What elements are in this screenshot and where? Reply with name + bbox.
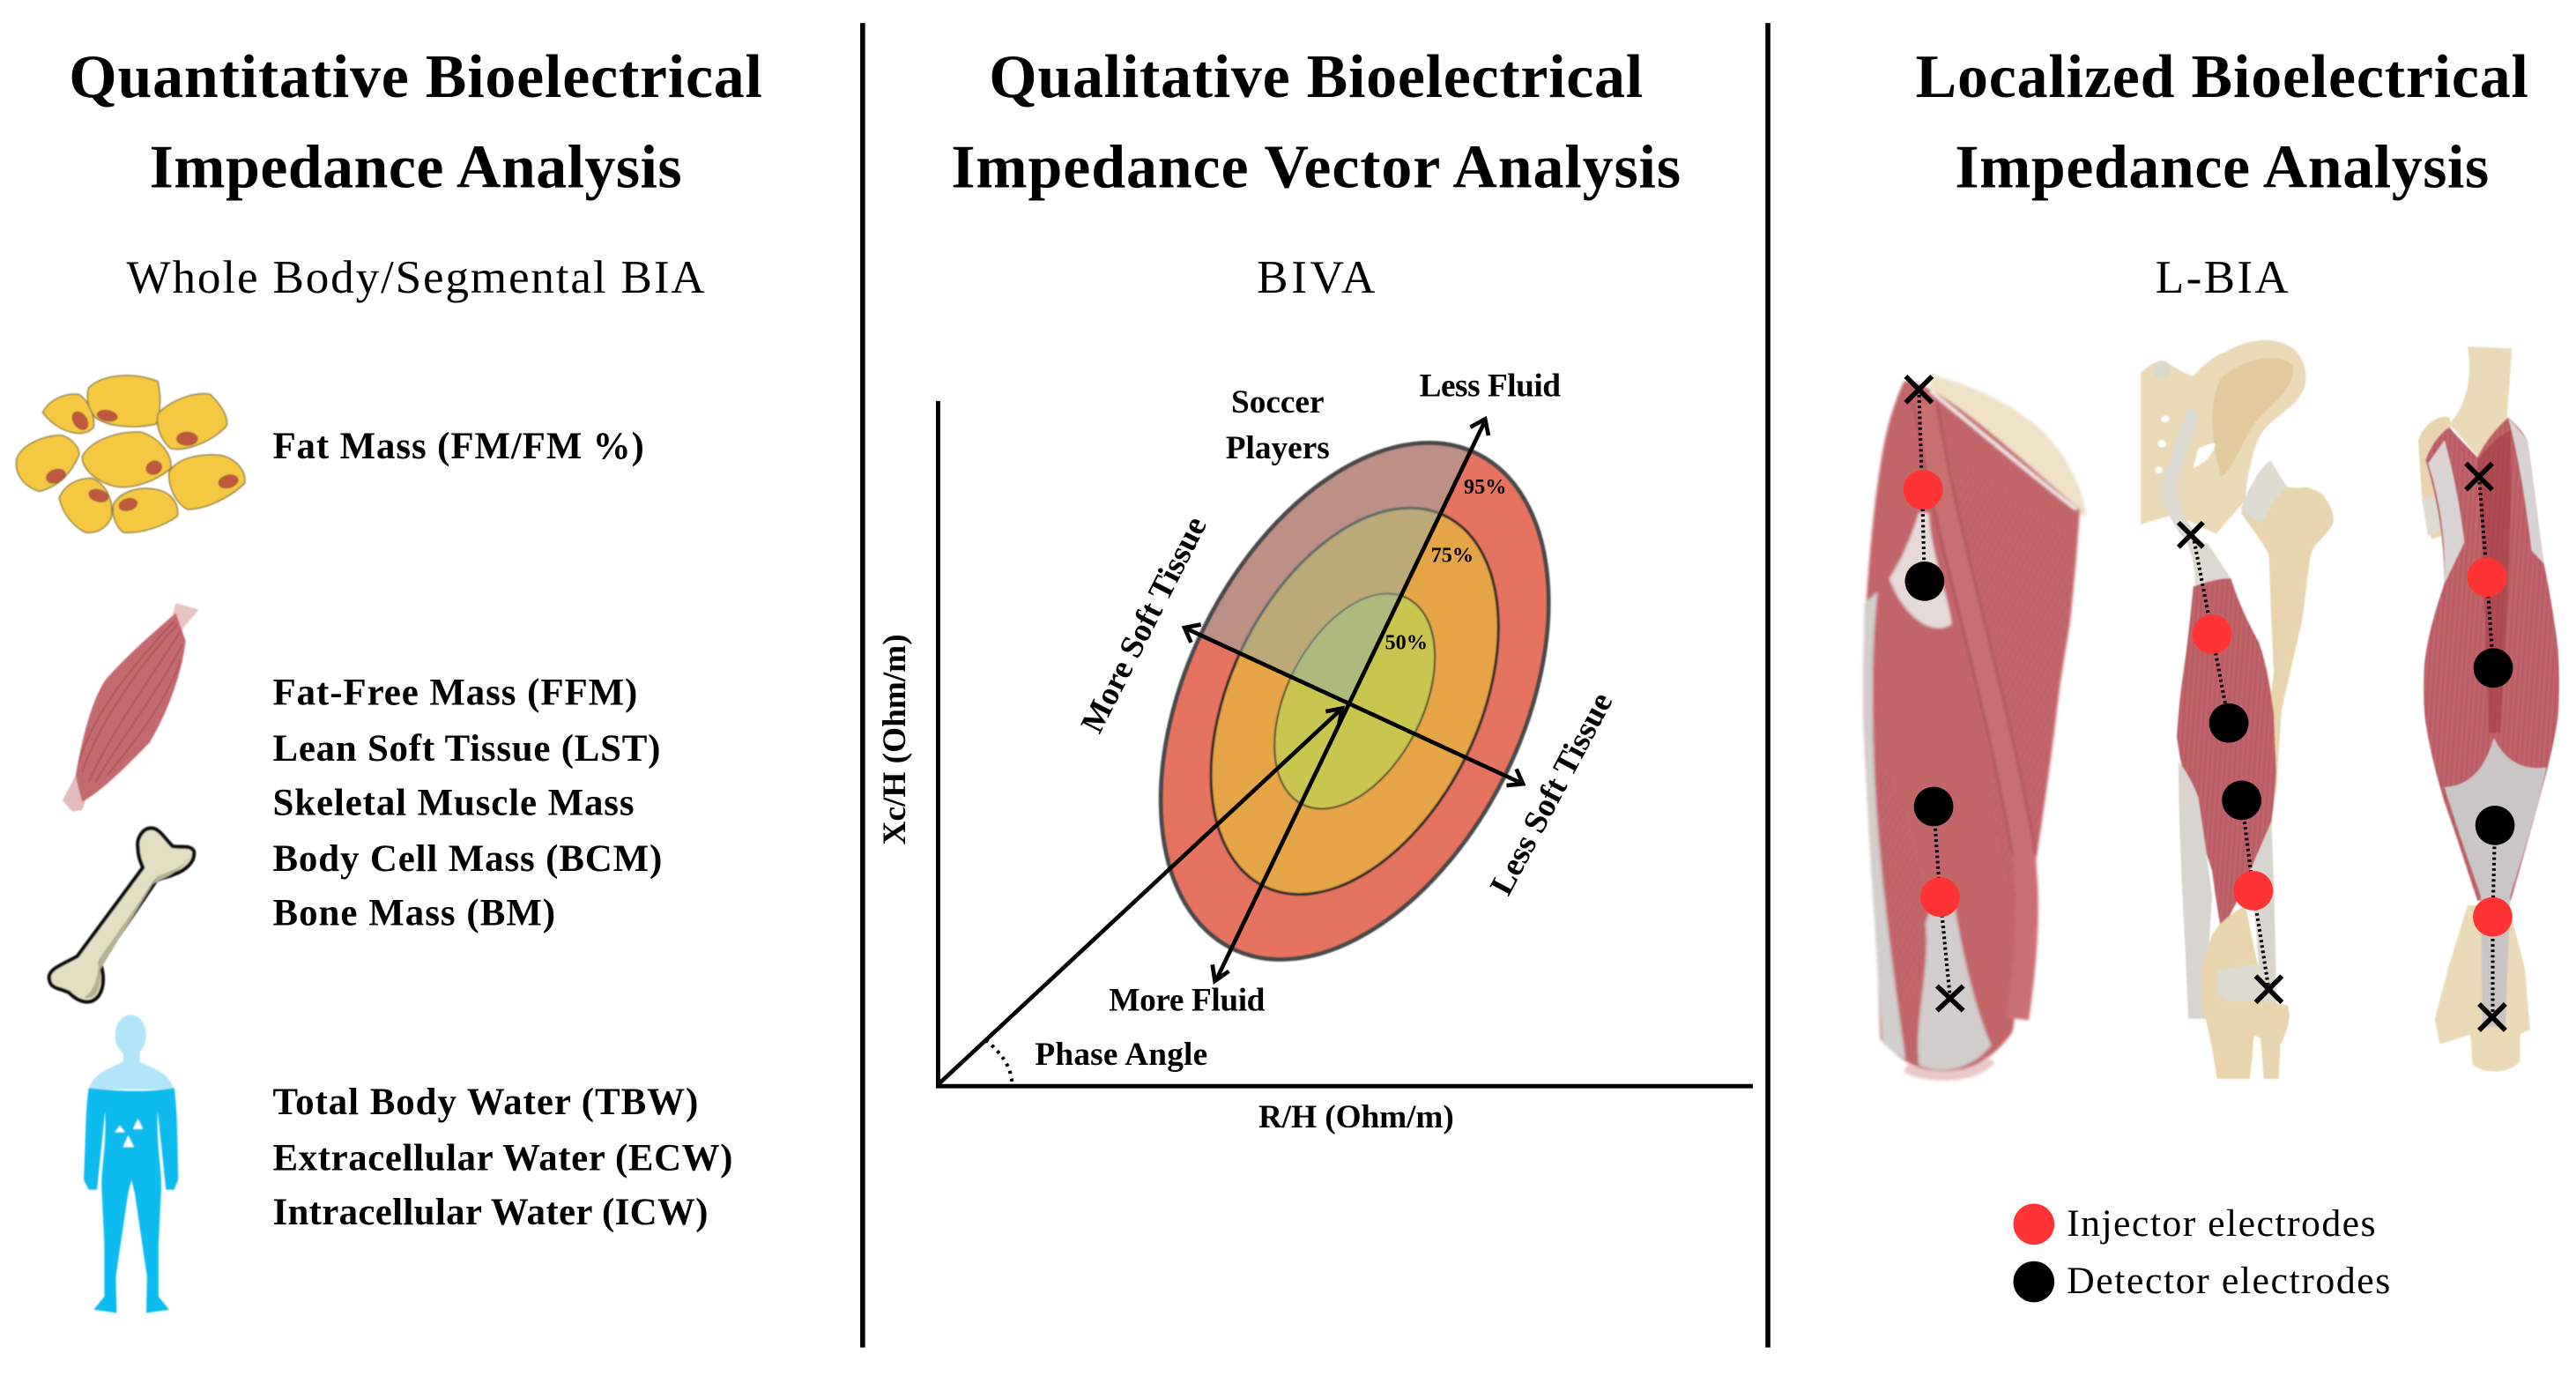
legend: electrodes: Detector electrodes [2067, 1260, 2390, 1302]
axes [938, 401, 1753, 1086]
heading: localized [1916, 43, 2528, 202]
list: water metrics: Intracellular Water (ICW) [272, 1192, 708, 1233]
label: 95 percent: 95% [1464, 475, 1506, 499]
illustration: anterior thigh [1863, 375, 2086, 1076]
icon: body water [84, 1015, 178, 1313]
chart: BIVA ellipses [1158, 440, 1552, 963]
list: fat-free mass metrics: Fat-Free Mass (FFM) [272, 673, 637, 714]
heading: quantitative: Impedance Analysis [150, 134, 682, 202]
outer ellipse outline [1082, 379, 1628, 1023]
tolerance ellipse: 95% [1082, 379, 1628, 1023]
label: soccer players: Soccer [1231, 384, 1325, 420]
panel: L-BIA [1863, 43, 2559, 1302]
label: soccer players [1226, 384, 1330, 466]
label: more fluid: More Fluid [1109, 982, 1266, 1018]
fluid axis arrow [1213, 419, 1488, 981]
label: less fluid: Less Fluid [1420, 368, 1561, 404]
heading: localized: Localized Bioelectrical [1916, 43, 2528, 111]
electrodes: lateral thigh [2179, 523, 2282, 1002]
legend: electrodes [2014, 1202, 2390, 1302]
subtitle: L-BIA: L-BIA [2156, 252, 2289, 303]
icon: bone [49, 829, 194, 1001]
illustration: lateral thigh and hip [2141, 340, 2334, 1079]
heading: localized: Impedance Analysis [1955, 134, 2489, 202]
heading: quantitative: Quantitative Bioelectrical [69, 43, 762, 111]
list: water metrics [272, 1082, 732, 1233]
label: 75 percent: 75% [1431, 544, 1474, 568]
divider right [1765, 23, 1771, 1348]
divider left [860, 23, 865, 1348]
legend: electrodes: Injector electrodes [2067, 1202, 2376, 1245]
label: more soft tissue: More Soft Tissue [1074, 511, 1214, 739]
label: soccer players: Players [1226, 430, 1330, 466]
icon: muscle [63, 603, 199, 812]
heading: qualitative [951, 43, 1681, 202]
tolerance ellipse: 50% [1242, 567, 1468, 835]
list: fat-free mass metrics: Body Cell Mass (BCM) [272, 838, 662, 880]
label: Xc/H axis: Xc/H (Ohm/m) [877, 634, 913, 844]
list: fat-free mass metrics: Bone Mass (BM) [272, 893, 555, 934]
list: fat-free mass metrics: Lean Soft Tissue (LST) [272, 728, 660, 770]
panel: BIVA [877, 43, 1753, 1135]
list: water metrics: Extracellular Water (ECW) [272, 1137, 732, 1179]
heading: quantitative [69, 43, 762, 202]
heading: qualitative: Qualitative Bioelectrical [989, 43, 1643, 111]
list: fat-free mass metrics: Skeletal Muscle Mass [272, 783, 635, 824]
list: fat-free mass metrics [272, 673, 662, 934]
label: phase angle: Phase Angle [1035, 1037, 1207, 1073]
soccer players quadrant overlay [1202, 444, 1468, 701]
panel: quantitative BIA [16, 43, 762, 1313]
subtitle: whole body: Whole Body/Segmental BIA [127, 252, 705, 303]
soft tissue axis arrow [1184, 624, 1523, 785]
subtitle: BIVA: BIVA [1257, 252, 1375, 303]
electrodes: posterior calf [2466, 464, 2514, 1030]
label: 50 percent: 50% [1385, 630, 1428, 654]
illustration: posterior calf [2418, 346, 2559, 1071]
icon: fat cells [16, 376, 245, 532]
phase angle arc [985, 1040, 1012, 1084]
label: fat mass: Fat Mass (FM/FM %) [272, 426, 644, 467]
tolerance ellipse: 75% [1153, 461, 1557, 941]
impedance vector arrow [938, 708, 1342, 1084]
electrodes: anterior thigh [1904, 376, 1964, 1010]
label: R/H axis: R/H (Ohm/m) [1258, 1099, 1454, 1135]
heading: qualitative: Impedance Vector Analysis [951, 134, 1681, 202]
list: water metrics: Total Body Water (TBW) [272, 1082, 698, 1123]
label: less soft tissue: Less Soft Tissue [1483, 687, 1620, 901]
